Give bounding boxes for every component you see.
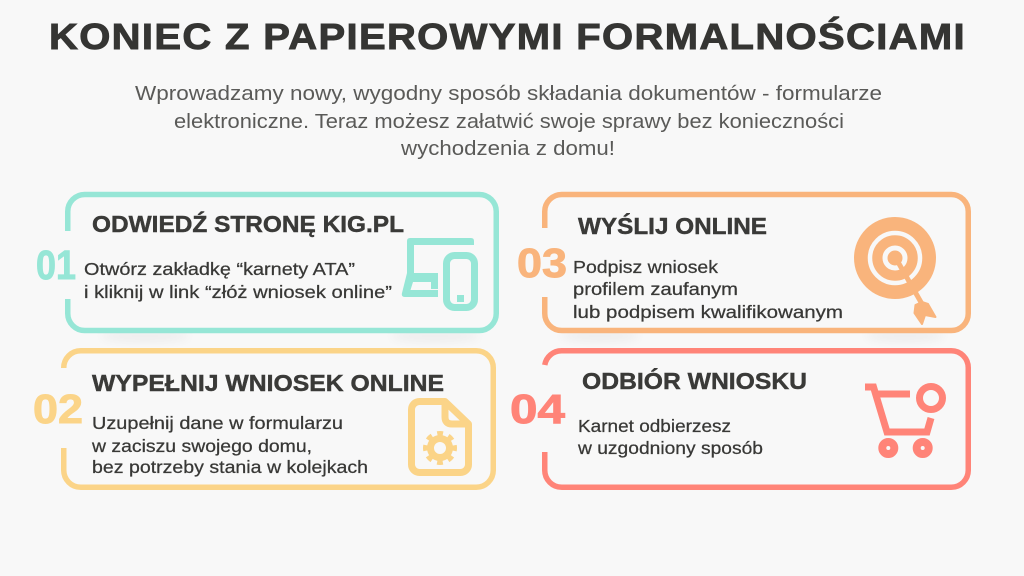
panel: step 01 (36, 194, 496, 342)
body text (84, 259, 392, 302)
heading: ODWIEDŹ STRONĘ KIG.PL (92, 210, 404, 237)
icon: laptop and phone (402, 238, 474, 308)
body text: Uzupełnij dane w formularzu (92, 413, 343, 433)
heading: ODBIÓR WNIOSKU (582, 367, 807, 394)
intro text: elektroniczne. Teraz możesz załatwić swoje sprawy bez konieczności (174, 110, 844, 133)
intro text: wychodzenia z domu! (400, 137, 615, 160)
icon: shopping cart (865, 386, 942, 454)
body text: bez potrzeby stania w kolejkach (92, 457, 368, 477)
body text (577, 416, 763, 458)
body text: i kliknij w link “złóż wniosek online” (84, 282, 392, 302)
body text: lub podpisem kwalifikowanym (573, 302, 843, 322)
number 01: 01 (36, 242, 76, 288)
icon: target with arrow (854, 217, 936, 324)
heading: WYŚLIJ ONLINE (578, 212, 767, 239)
icon: document with gear (412, 402, 468, 472)
heading: WYPEŁNIJ WNIOSEK ONLINE (92, 370, 444, 396)
body text: profilem zaufanym (573, 279, 738, 299)
body text: Otwórz zakładkę “karnety ATA” (84, 259, 355, 279)
number 02: 02 (33, 386, 83, 432)
panel: step 02 (33, 351, 493, 487)
intro text: Wprowadzamy nowy, wygodny sposób składania dokumentów - formularze (135, 82, 882, 105)
title: KONIEC Z PAPIEROWYMI FORMALNOŚCIAMI (49, 15, 966, 57)
body text (91, 413, 368, 477)
body text: Karnet odbierzesz (578, 416, 731, 436)
intro text (135, 82, 882, 160)
body text: Podpisz wniosek (573, 257, 718, 277)
body text: w zaciszu swojego domu, (91, 436, 312, 456)
body text: w uzgodniony sposób (577, 438, 763, 458)
panel: step 04 (510, 351, 968, 487)
body text (573, 257, 843, 322)
number 04: 04 (510, 386, 565, 432)
number 03: 03 (517, 240, 567, 286)
panel: step 03 (517, 194, 968, 342)
